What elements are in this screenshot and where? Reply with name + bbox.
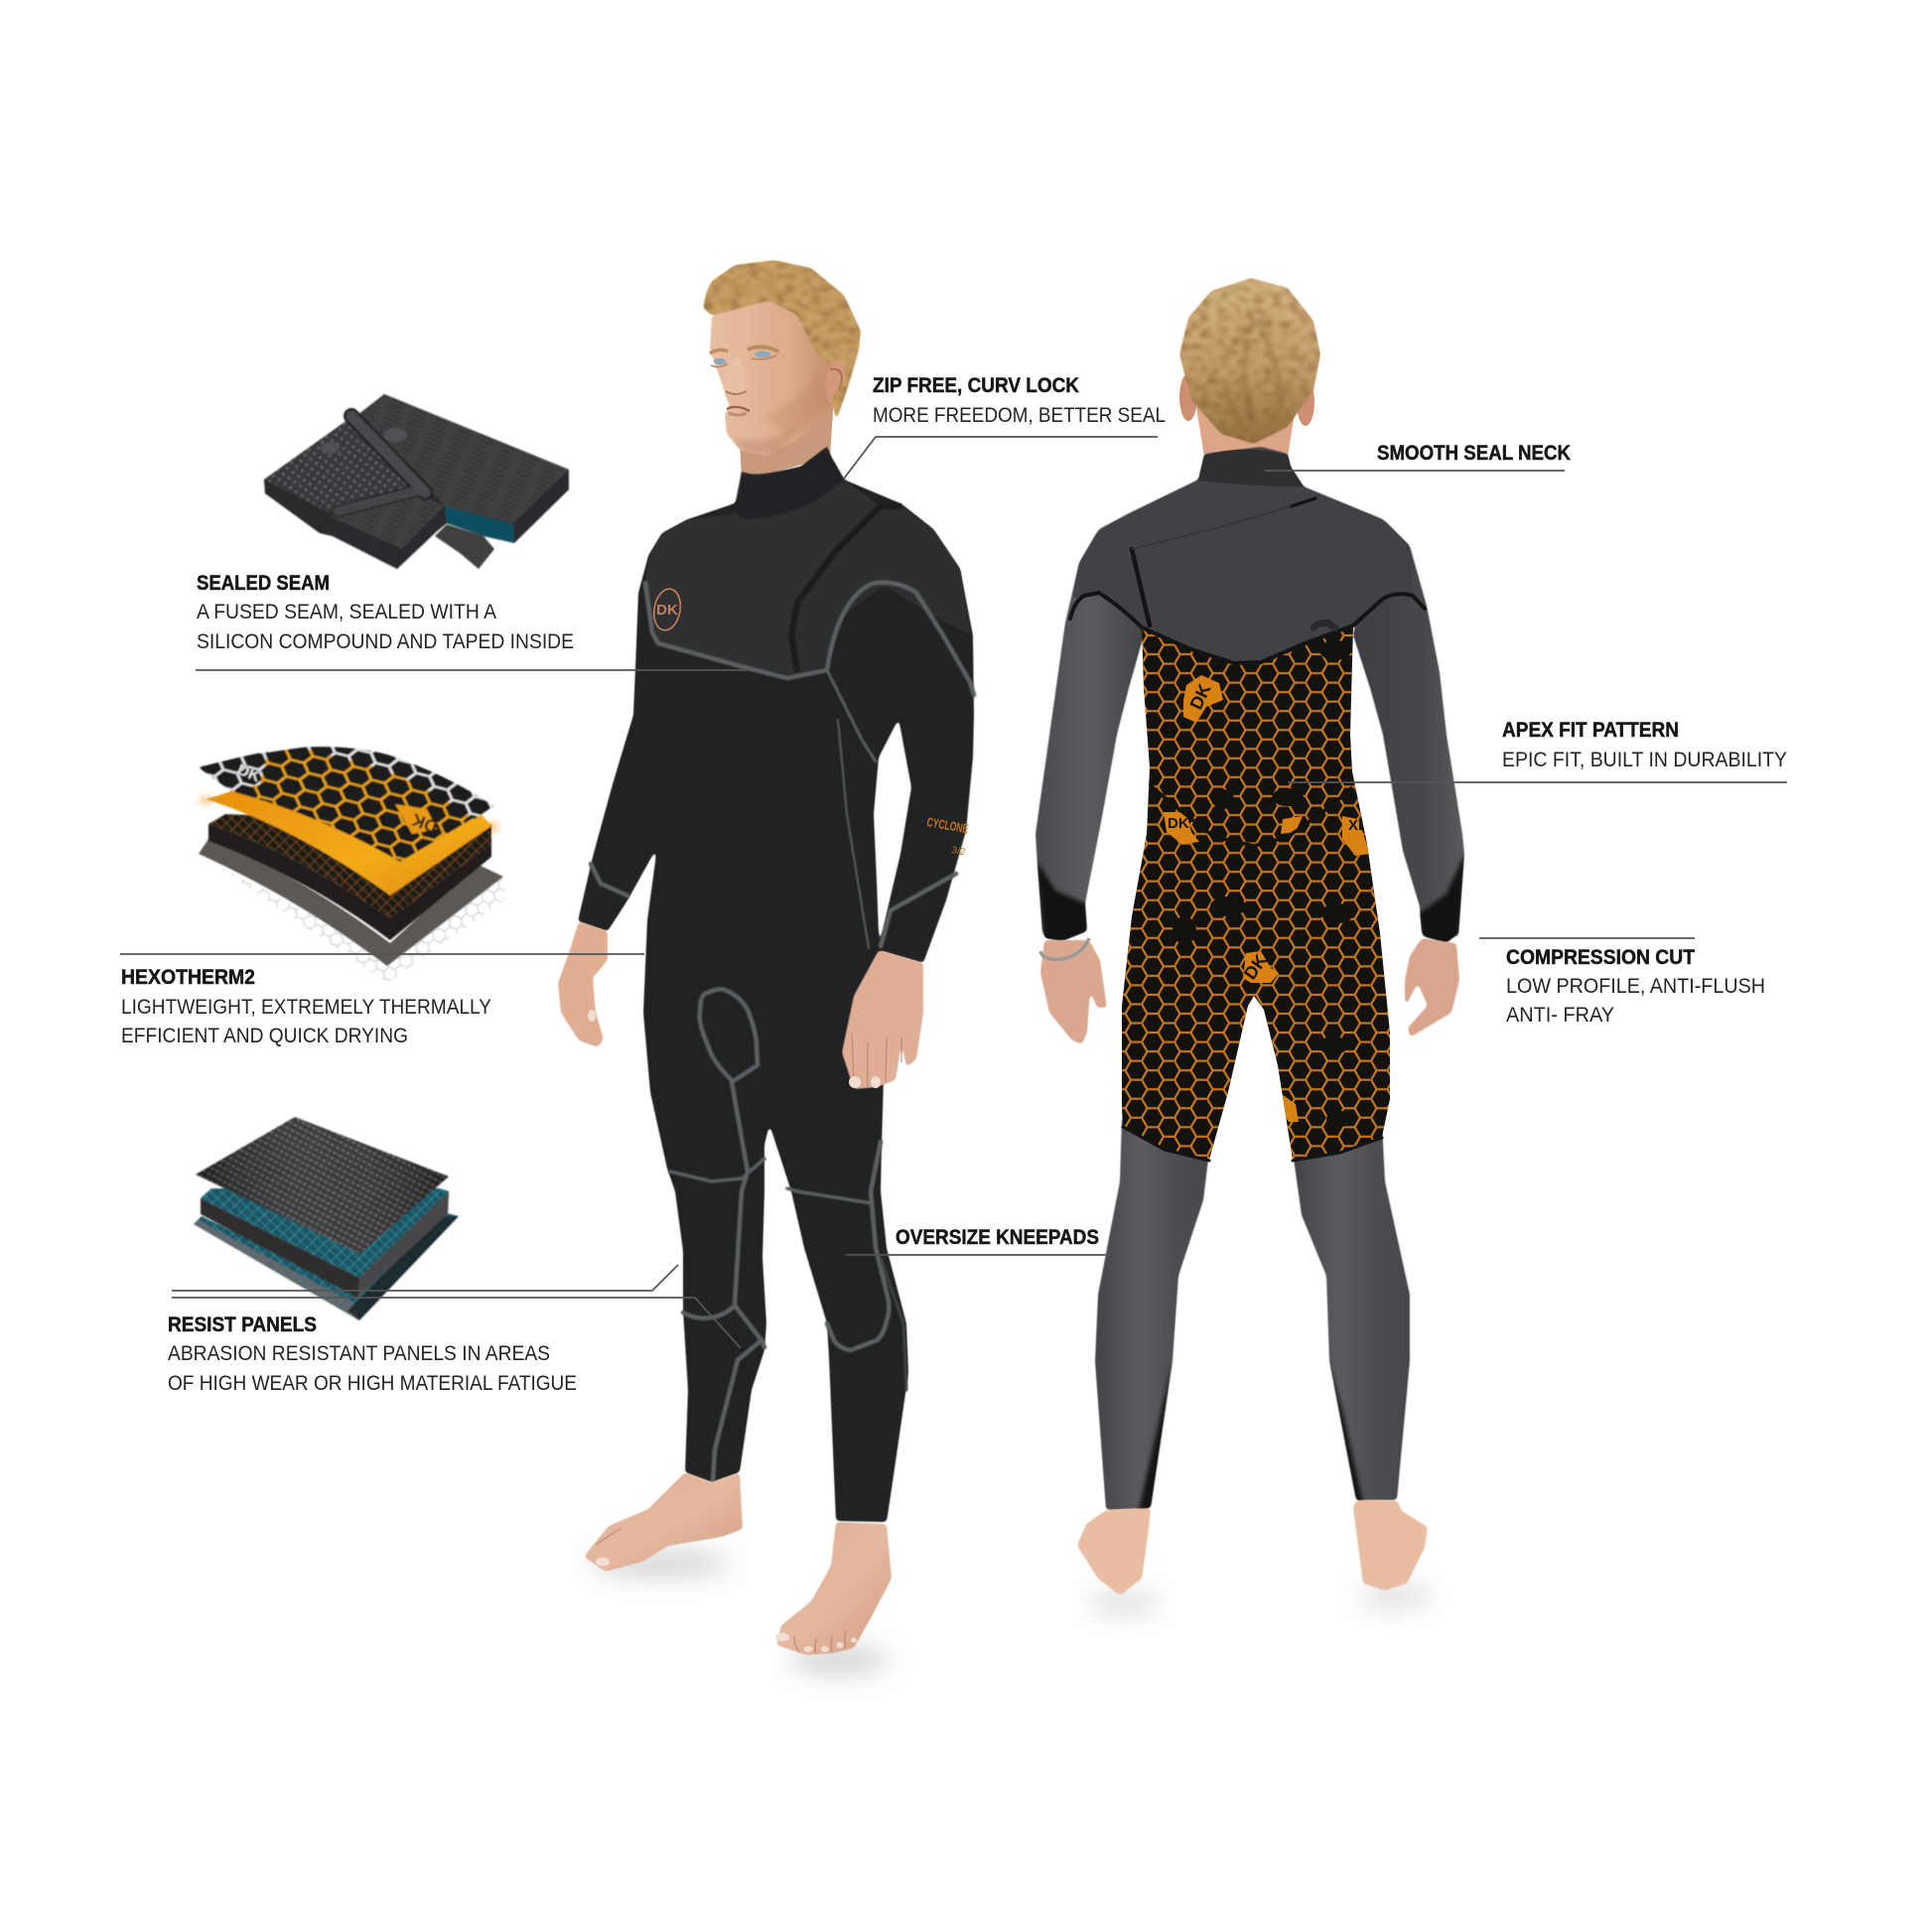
teal top: [201, 1188, 449, 1278]
white hex edge: [199, 747, 493, 819]
suit silhouette: [578, 447, 974, 1522]
carbon top sheet: [196, 1117, 449, 1254]
DK marks: DK: [1240, 951, 1271, 983]
orange heat sheet: [207, 791, 491, 896]
DK marks: DK: [1168, 815, 1189, 832]
callout: sealed seam: A FUSED SEAM, SEALED WITH A: [197, 601, 496, 623]
hair: [703, 260, 861, 422]
orange logo blobs: [1164, 675, 1370, 1122]
callout: hexotherm2: EFFICIENT AND QUICK DRYING: [121, 1025, 408, 1047]
front figure: [558, 260, 974, 1674]
callout: sealed seam: SILICON COMPOUND AND TAPED INSIDE: [197, 630, 574, 653]
foam block: [201, 1191, 449, 1298]
base: [264, 394, 569, 569]
callout: compression cut: [1479, 938, 1765, 1027]
callout: resist panels: OF HIGH WEAR OR HIGH MATERIAL FATIGUE: [168, 1372, 577, 1395]
bottom sheet: [199, 839, 503, 966]
hands and feet: [1040, 938, 1459, 1595]
bracelet: [1040, 938, 1089, 959]
swatch: hexotherm2: [199, 747, 506, 983]
back figure: [1035, 278, 1464, 1614]
callout: apex fit pattern: [1288, 719, 1787, 782]
lower tape: [435, 524, 494, 569]
callout: resist panels: RESIST PANELS: [168, 1313, 317, 1336]
back of hair: [1179, 278, 1320, 444]
chest logo: DK: [656, 602, 678, 619]
swatch: sealed seam: [264, 394, 569, 569]
bottom sheet: [194, 1213, 459, 1320]
head and neck: [703, 260, 861, 482]
teal cut: [445, 506, 514, 543]
callout: resist panels: ABRASION RESISTANT PANELS IN AREAS: [168, 1342, 550, 1365]
swatch: resist panels: [194, 1117, 459, 1320]
toes and finger detail: [596, 1033, 901, 1654]
callout: hexotherm2: LIGHTWEIGHT, EXTREMELY THERMALLY: [121, 996, 491, 1019]
DK marks: [1168, 681, 1369, 983]
callout: hexotherm2: [120, 954, 644, 1047]
legs: [1095, 1117, 1410, 1510]
foam block: [208, 824, 491, 940]
hex logo marks: DK: [409, 809, 440, 837]
foot shadows: [591, 1551, 889, 1674]
collar: [735, 447, 844, 519]
DK marks: XD: [1348, 817, 1369, 834]
callout: smooth seal neck: SMOOTH SEAL NECK: [1377, 442, 1571, 465]
callout: apex fit pattern: EPIC FIT, BUILT IN DURABILITY: [1502, 749, 1787, 771]
chest panel: [645, 457, 881, 675]
seams: [591, 583, 974, 1481]
sleeve print: [925, 814, 970, 858]
left block: [264, 420, 422, 513]
head: [1179, 278, 1320, 457]
upper back: [1072, 447, 1413, 663]
foot shadows: [1088, 1586, 1431, 1614]
callout: hexotherm2: HEXOTHERM2: [121, 966, 255, 989]
right block: [357, 394, 569, 523]
callout: zip free, curv lock: ZIP FREE, CURV LOCK: [873, 374, 1079, 397]
water droplets: [322, 428, 407, 454]
callout: compression cut: COMPRESSION CUT: [1506, 946, 1695, 969]
black seams: [1070, 498, 1425, 1161]
chest logo: [651, 587, 683, 632]
infographic: wetsuit features: [120, 260, 1787, 1685]
waist seam: [1149, 784, 1352, 846]
callout: compression cut: ANTI- FRAY: [1506, 1004, 1614, 1027]
collar: [1198, 450, 1304, 486]
honeycomb panel: [1122, 627, 1390, 1160]
DK marks: DK: [1185, 681, 1215, 713]
callout: apex fit pattern: APEX FIT PATTERN: [1502, 719, 1679, 742]
callout: sealed seam: [196, 572, 747, 670]
callout: compression cut: LOW PROFILE, ANTI-FLUSH: [1506, 975, 1765, 998]
hands and feet: [558, 921, 923, 1655]
front block: [330, 493, 444, 549]
white hex mesh: [213, 864, 506, 983]
chest divider: [791, 506, 901, 672]
callout: zip free, curv lock: [844, 374, 1166, 479]
black blotches: [1173, 640, 1354, 1127]
hex logo marks: DK: [235, 761, 263, 786]
orange glow: [199, 795, 499, 833]
seam tape: [338, 416, 425, 511]
arms: [1035, 519, 1464, 943]
carbon sheen: [196, 1117, 449, 1254]
hair streaks: [1223, 318, 1291, 427]
sleeve shading: [791, 503, 971, 675]
callout: oversize kneepads: OVERSIZE KNEEPADS: [896, 1226, 1099, 1249]
top hex sheet: [199, 747, 493, 862]
callout: zip free, curv lock: MORE FREEDOM, BETTER SEAL: [873, 404, 1166, 427]
callout: resist panels: [168, 1265, 741, 1395]
brows, eyes, nose, mouth: [710, 346, 778, 415]
mesh top face: [208, 814, 491, 918]
sleeve print: 3/2: [950, 845, 967, 858]
hex logo marks: [235, 761, 440, 837]
callout: sealed seam: SEALED SEAM: [197, 572, 330, 595]
sleeve print: CYCLONE: [925, 814, 970, 836]
